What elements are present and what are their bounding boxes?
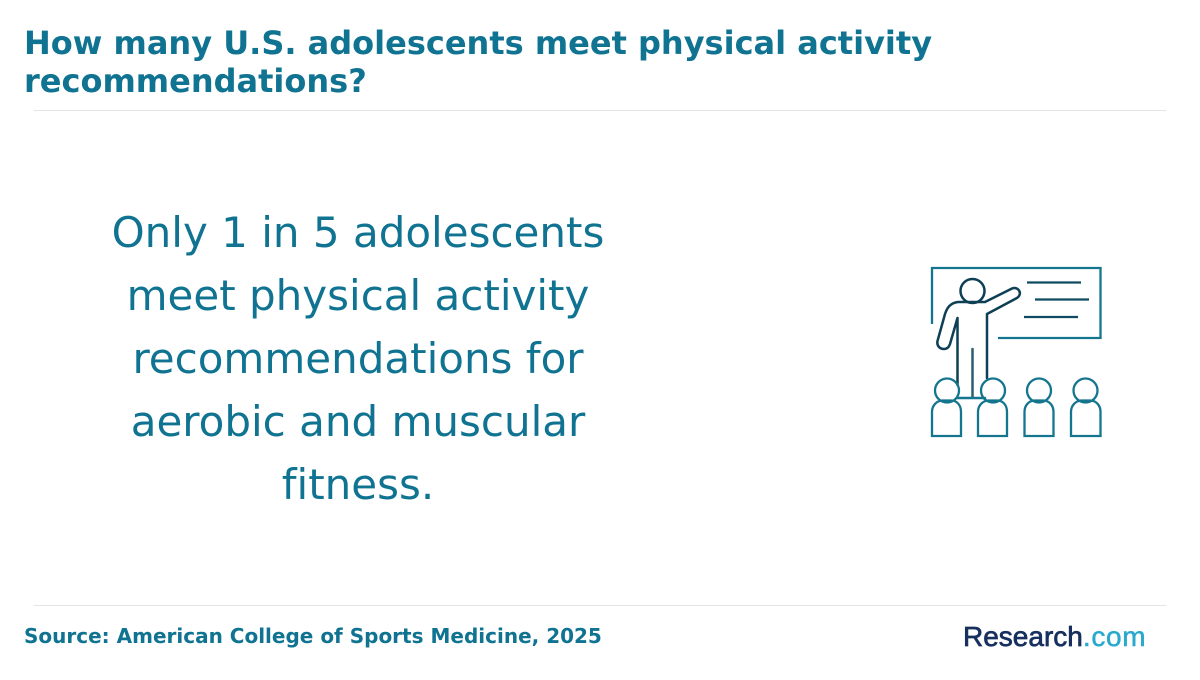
title <box>24 24 932 100</box>
main statement: recommendations for <box>132 334 584 382</box>
students <box>932 378 1100 436</box>
board text lines <box>1024 282 1089 317</box>
main statement: fitness. <box>282 460 434 508</box>
main statement: aerobic and muscular <box>131 396 585 446</box>
title: How many U.S. adolescents meet physical activity <box>24 24 932 62</box>
main statement: meet physical activity <box>127 270 589 320</box>
title: recommendations? <box>24 62 367 100</box>
logo: Research.com: Research.com <box>963 621 1146 652</box>
main statement <box>112 208 604 508</box>
source line: Source: American College of Sports Medicine, 2025 <box>24 624 602 648</box>
main statement: Only 1 in 5 adolescents <box>112 208 604 256</box>
teacher figure <box>937 279 1020 398</box>
presentation board <box>932 268 1100 338</box>
